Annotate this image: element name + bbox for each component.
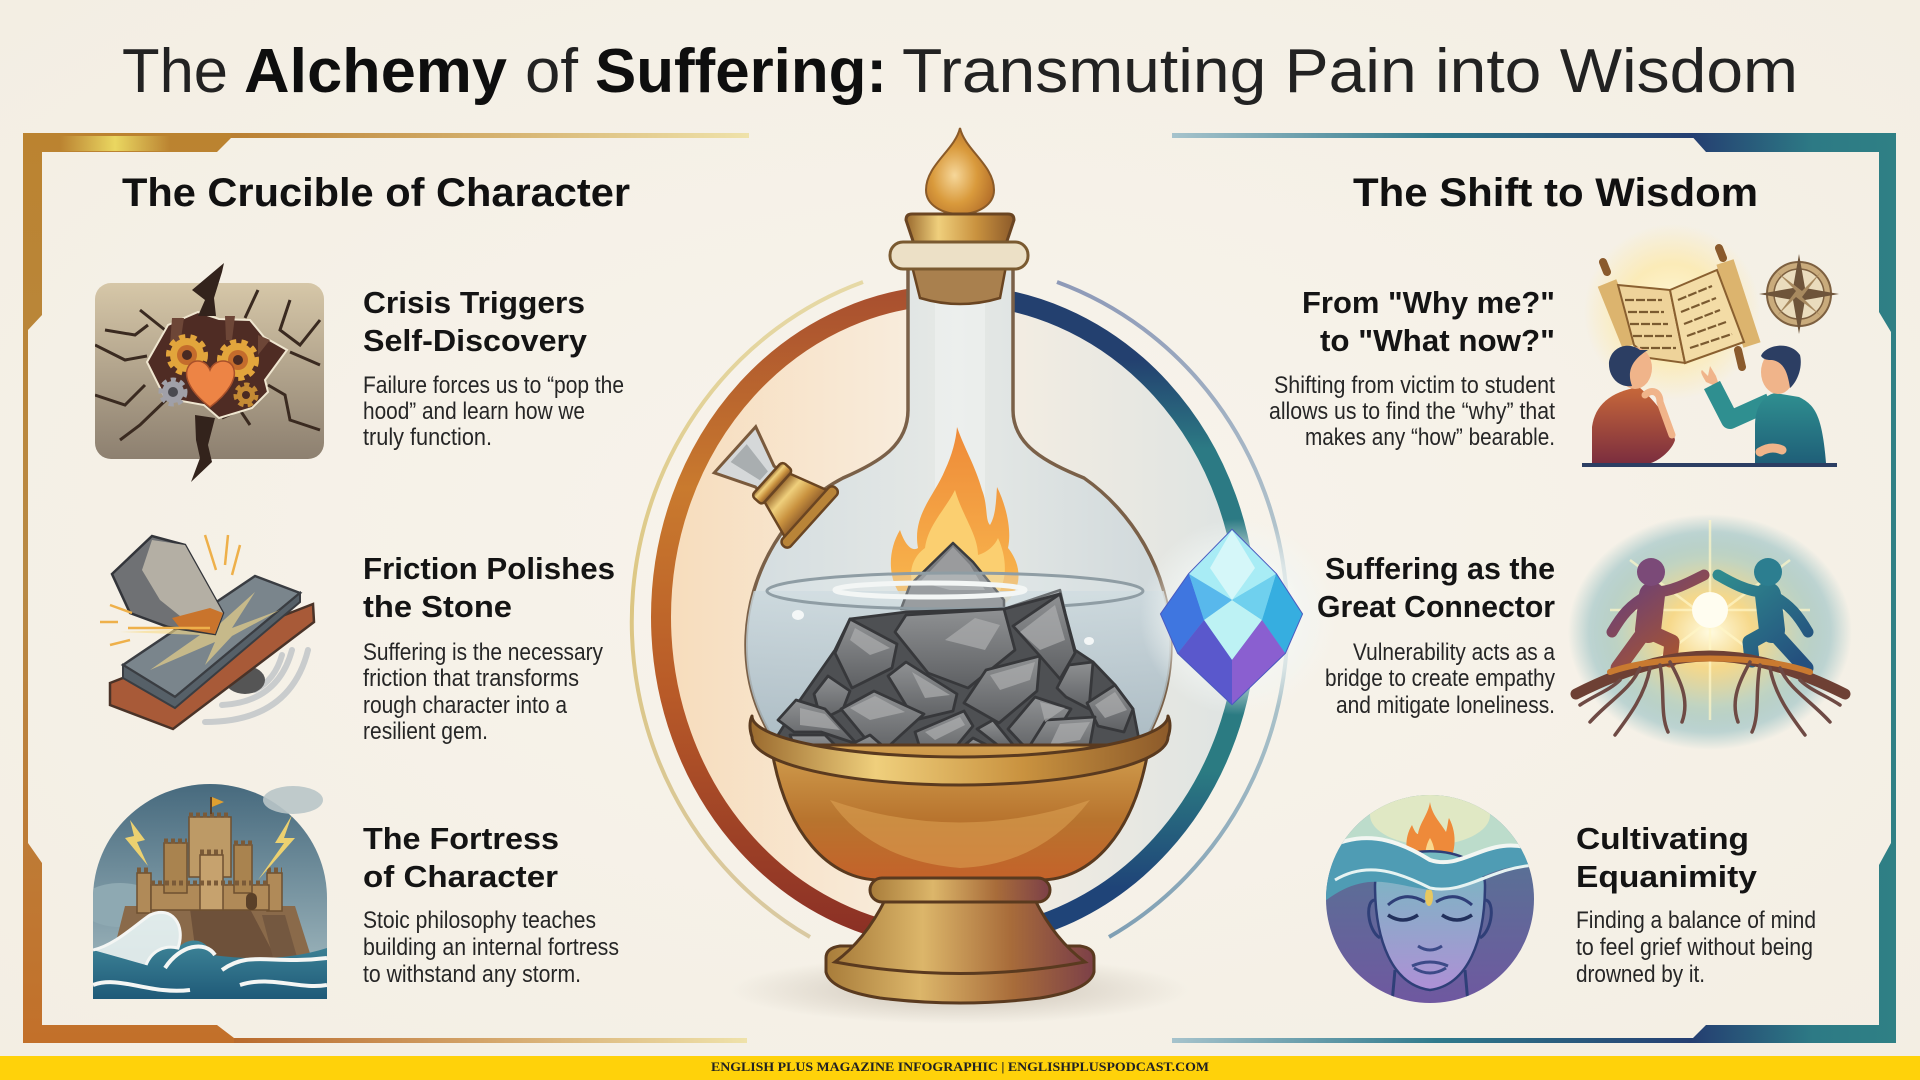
footer bar bbox=[0, 1056, 1920, 1080]
text: Suffering as the Great Connector: and mitigate loneliness. bbox=[1336, 692, 1555, 719]
water surface bbox=[767, 573, 1143, 609]
icon: meditating face with flame bbox=[1320, 785, 1540, 1003]
title: The bbox=[122, 37, 228, 106]
text: Crisis Triggers Self-Discovery: Self-Discovery bbox=[363, 323, 588, 358]
text: Cultivating Equanimity bbox=[1576, 821, 1816, 988]
gem bbox=[1161, 530, 1302, 704]
text: Crisis Triggers Self-Discovery: hood” and learn how we bbox=[363, 398, 585, 425]
face bbox=[1375, 851, 1485, 990]
figure right head bbox=[1754, 558, 1782, 586]
flask stopper: drop bbox=[926, 128, 994, 214]
text: The Fortress of Character: Stoic philosophy teaches bbox=[363, 907, 596, 934]
text: Cultivating Equanimity: drowned by it. bbox=[1576, 961, 1705, 988]
text: Cultivating Equanimity: Cultivating bbox=[1576, 821, 1749, 856]
text: Suffering as the Great Connector: Suffering as the bbox=[1325, 551, 1555, 586]
pedestal knob bbox=[870, 878, 1050, 902]
waves bbox=[1326, 840, 1529, 900]
icon: stone on whetstone bbox=[100, 535, 314, 729]
gear cluster bbox=[161, 337, 256, 405]
figure right bbox=[1718, 575, 1808, 668]
scroll bbox=[1603, 248, 1752, 367]
table line bbox=[1582, 463, 1837, 467]
ground shadow bbox=[730, 956, 1190, 1024]
title: Transmuting Pain into Wisdom bbox=[902, 37, 1798, 106]
text: Friction Polishes the Stone: Friction Polishes bbox=[363, 551, 615, 586]
text: Cultivating Equanimity: Equanimity bbox=[1576, 859, 1758, 894]
text: From Why me to What now: to "What now?" bbox=[1320, 323, 1555, 358]
text: Friction Polishes the Stone: the Stone bbox=[363, 589, 512, 624]
text: The Fortress of Character: of Character bbox=[363, 859, 558, 894]
brass bowl body bbox=[771, 745, 1149, 880]
text: Suffering as the Great Connector: Vulnerability acts as a bbox=[1353, 639, 1556, 666]
flask glass bbox=[746, 268, 1171, 760]
title: Alchemy bbox=[244, 37, 508, 106]
flask stopper: collar bbox=[906, 214, 1014, 244]
text: The Fortress of Character: The Fortress bbox=[363, 821, 559, 856]
rock highlights bbox=[800, 605, 1127, 745]
text: Friction Polishes the Stone: rough character into a bbox=[363, 692, 568, 719]
water in flask bbox=[746, 591, 1171, 735]
text: Suffering as the Great Connector bbox=[1317, 551, 1556, 719]
person left bbox=[1592, 346, 1675, 463]
text: The Fortress of Character: to withstand any storm. bbox=[363, 961, 581, 988]
text: From Why me to What now: allows us to find the “why” that bbox=[1269, 398, 1555, 425]
text: Friction Polishes the Stone bbox=[363, 551, 615, 745]
flame bbox=[891, 427, 1019, 606]
text: Crisis Triggers Self-Discovery: truly function. bbox=[363, 424, 492, 451]
text: Suffering as the Great Connector: Great Connector bbox=[1317, 589, 1555, 624]
text: Friction Polishes the Stone: friction that transforms bbox=[363, 665, 579, 692]
gem glow bbox=[1140, 519, 1336, 715]
text: The Fortress of Character bbox=[363, 821, 619, 988]
top rock above water bbox=[901, 543, 1065, 625]
heading: The Shift to Wisdom: The Shift to Wisdom bbox=[1353, 171, 1758, 215]
text: Crisis Triggers Self-Discovery: Crisis Triggers bbox=[363, 285, 585, 320]
ring: orange left arc bbox=[661, 295, 954, 939]
footer bar: ENGLISH PLUS MAGAZINE INFOGRAPHIC | ENGLISHPLUSPODCAST.COM bbox=[711, 1059, 1209, 1074]
thin gold arc bbox=[632, 282, 863, 937]
text: From Why me to What now: From "Why me?" bbox=[1302, 285, 1555, 320]
compass bbox=[1759, 254, 1839, 334]
icon: two figures joined over a root bridge bbox=[1568, 514, 1852, 750]
pedestal cone bbox=[835, 900, 1085, 974]
glass highlights bbox=[792, 610, 1094, 645]
figure left head bbox=[1637, 558, 1665, 586]
text: Crisis Triggers Self-Discovery: Failure forces us to “pop the bbox=[363, 372, 624, 399]
person right bbox=[1701, 346, 1826, 463]
text: Cultivating Equanimity: to feel grief without being bbox=[1576, 934, 1813, 961]
brass bowl rim bbox=[750, 716, 1170, 785]
flask stopper: cork bbox=[912, 266, 1006, 304]
text: From Why me to What now: Shifting from victim to student bbox=[1274, 372, 1555, 399]
title: of bbox=[525, 37, 579, 106]
left panel frame bbox=[23, 133, 749, 1043]
text: From Why me to What now: makes any “how” bearable. bbox=[1305, 424, 1555, 451]
text: The Fortress of Character: building an internal fortress bbox=[363, 934, 619, 961]
figure left bbox=[1612, 575, 1704, 668]
pedestal base bbox=[826, 946, 1094, 1003]
text: Crisis Triggers Self-Discovery bbox=[363, 285, 624, 451]
icon: scroll, compass and two people bbox=[1582, 224, 1839, 467]
text: Friction Polishes the Stone: Suffering is the necessary bbox=[363, 639, 603, 666]
central alchemy flask illustration bbox=[632, 128, 1336, 1024]
ring: teal right arc bbox=[954, 295, 1247, 939]
text: Suffering as the Great Connector: bridge to create empathy bbox=[1325, 665, 1555, 692]
flask stopper: rim bbox=[890, 242, 1028, 269]
ring: inner fill bbox=[661, 295, 1247, 939]
icon: fortress in a storm bbox=[80, 784, 327, 999]
heart bbox=[187, 361, 234, 407]
text: Cultivating Equanimity: Finding a balance of mind bbox=[1576, 907, 1816, 934]
text: From Why me to What now bbox=[1269, 285, 1555, 451]
icon: cracked wall with gears and heart bbox=[95, 263, 324, 482]
title bbox=[122, 37, 1798, 106]
root bridge bbox=[1576, 656, 1845, 735]
coal rock pile bbox=[778, 594, 1140, 770]
heading: The Crucible of Character: The Crucible of Character bbox=[122, 171, 630, 215]
title: Suffering: bbox=[595, 37, 887, 106]
flame bbox=[1406, 802, 1455, 853]
right panel frame bbox=[1172, 133, 1896, 1043]
flask side arm bbox=[709, 421, 840, 550]
thin blue arc bbox=[1057, 282, 1288, 937]
text: Friction Polishes the Stone: resilient gem. bbox=[363, 718, 488, 745]
